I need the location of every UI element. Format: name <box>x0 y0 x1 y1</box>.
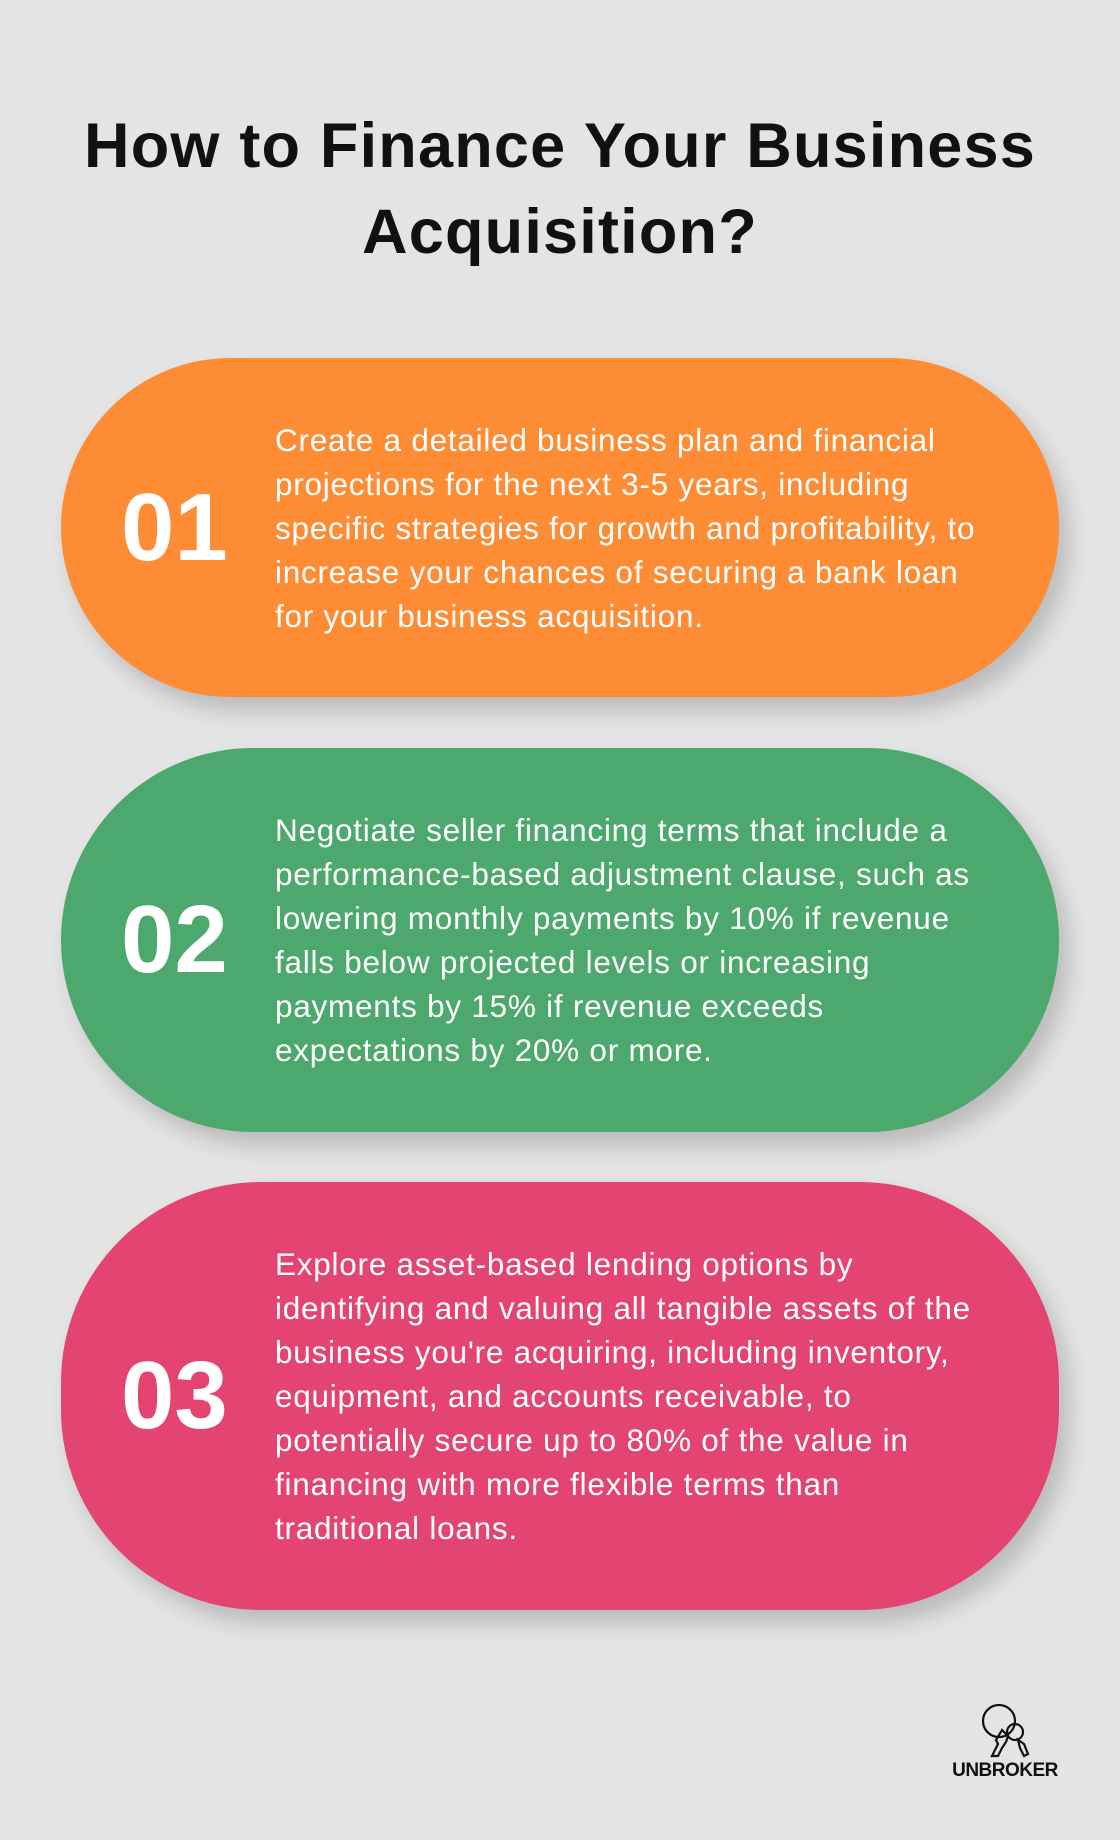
text step 02: payments by 15% if revenue exceeds <box>275 988 824 1024</box>
panel: step 03 <box>61 1182 1059 1610</box>
panel: step 02 <box>61 748 1059 1132</box>
panel: step 01 <box>61 358 1059 697</box>
text step 03: Explore asset-based lending options by <box>275 1246 853 1282</box>
text step 02: performance-based adjustment clause, such as <box>275 856 970 892</box>
text step 03: traditional loans. <box>275 1510 518 1546</box>
text step 03: equipment, and accounts receivable, to <box>275 1378 852 1414</box>
number 01: 01 <box>121 474 228 580</box>
text step 03: identifying and valuing all tangible assets of the <box>275 1290 971 1326</box>
text step 03: business you're acquiring, including inventory, <box>275 1334 950 1370</box>
text step 01: for your business acquisition. <box>275 598 704 634</box>
number 02: 02 <box>121 886 228 993</box>
text step 02: expectations by 20% or more. <box>275 1032 713 1068</box>
text step 02: lowering monthly payments by 10% if revenue <box>275 900 950 936</box>
text step 01: projections for the next 3-5 years, including <box>275 466 909 502</box>
logo <box>952 1704 1058 1781</box>
logo text: UNBROKER <box>952 1760 1058 1781</box>
text step 03: financing with more flexible terms than <box>275 1466 840 1502</box>
icon: keys <box>982 1704 1030 1758</box>
title <box>84 111 1036 267</box>
text step 03 <box>275 1246 971 1546</box>
text step 02: Negotiate seller financing terms that include a <box>275 812 948 848</box>
text step 01: specific strategies for growth and profitability, to <box>275 510 975 546</box>
text step 03: potentially secure up to 80% of the value in <box>275 1422 909 1458</box>
text step 02: falls below projected levels or increasing <box>275 944 870 980</box>
title: Acquisition? <box>362 197 758 267</box>
number 03: 03 <box>121 1342 228 1449</box>
title: How to Finance Your Business <box>84 111 1036 181</box>
text step 01: Create a detailed business plan and financial <box>275 422 936 458</box>
text step 01: increase your chances of securing a bank loan <box>275 554 958 590</box>
text step 01 <box>275 422 975 634</box>
text step 02 <box>275 812 970 1068</box>
